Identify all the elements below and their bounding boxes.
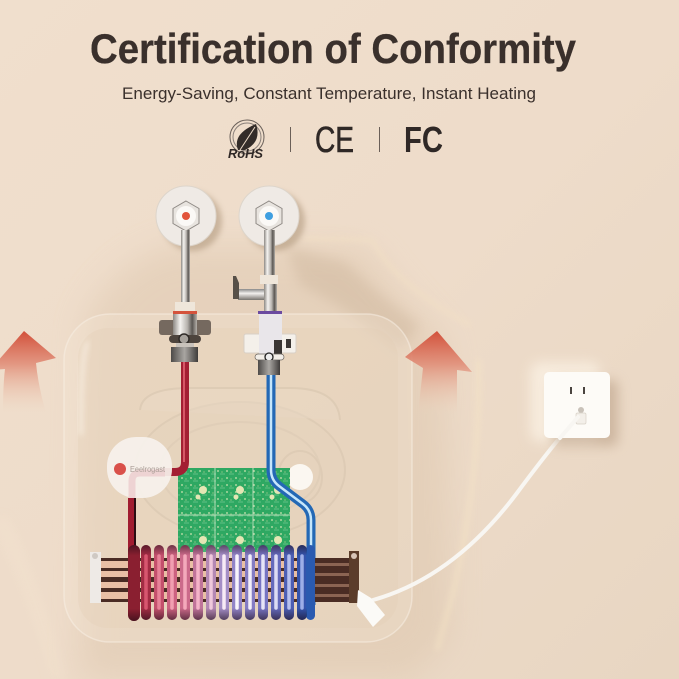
- flange: hot: [162, 191, 222, 251]
- icon: FCC mark: FC: [404, 119, 443, 160]
- divider: [290, 127, 291, 152]
- cold pipe: [271, 375, 311, 605]
- hot water pipe and wall fitting: [107, 186, 222, 600]
- subtitle: Energy-Saving, Constant Temperature, Instant Heating: [122, 85, 536, 103]
- left bracket: [90, 552, 101, 603]
- icon: RoHS leaf badge: [228, 120, 264, 161]
- transparent heater casing: [64, 314, 412, 642]
- cable plug at heater: [357, 590, 385, 627]
- coil end shading: [128, 545, 307, 621]
- icon: CE mark: CE: [315, 119, 354, 160]
- coil turns: [128, 545, 315, 621]
- icon: RoHS leaf badge: RoHS: [228, 147, 264, 161]
- wall socket: [530, 362, 618, 446]
- power cable: [357, 417, 578, 627]
- control disc: [107, 437, 172, 498]
- heating element: [90, 545, 359, 621]
- flange: cold: [245, 191, 305, 251]
- hot pipe: [160, 362, 185, 472]
- arrow: left heat: [0, 331, 56, 413]
- hot water pipe and wall fitting: Eeelrogast: [130, 464, 166, 474]
- coil highlights: [146, 556, 302, 608]
- wall shadow and light streaks: [0, 238, 479, 679]
- arrow: right heat: [405, 331, 472, 414]
- copper core bars: [100, 558, 350, 602]
- circuit board: [178, 468, 290, 552]
- divider: [379, 127, 380, 152]
- cold water pipe and wall fitting: [233, 186, 311, 605]
- title: Certification of Conformity: [90, 25, 577, 72]
- inner tank ghost shapes: [135, 388, 345, 538]
- right bracket: [349, 551, 359, 603]
